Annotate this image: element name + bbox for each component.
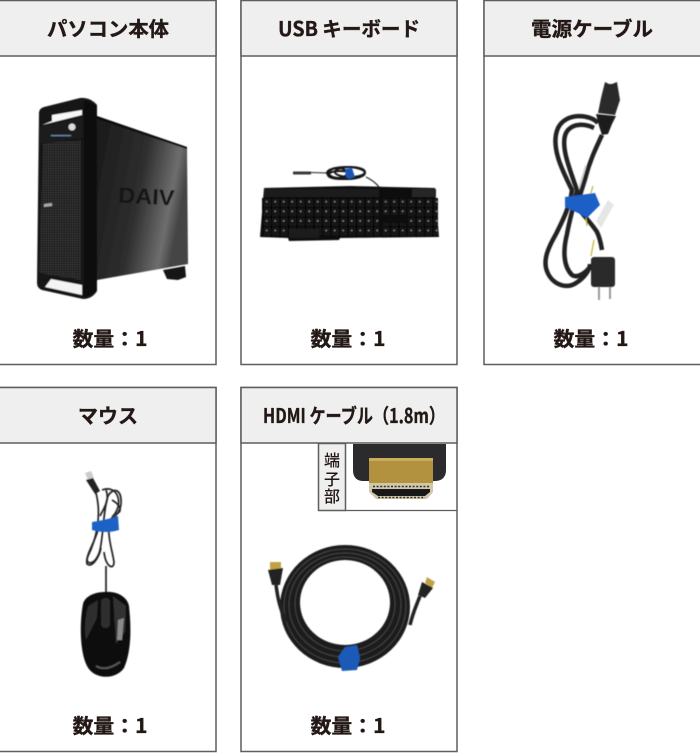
heading: HDMI cable (241, 388, 457, 443)
heading: PC body (0, 0, 216, 56)
heading: HDMI cable: HDMI ケーブル（1.8m） (263, 400, 445, 429)
panel: HDMI cable (241, 388, 457, 752)
heading: USB keyboard (241, 0, 457, 56)
logo: DAIV: DAIV (118, 183, 175, 210)
icon: desktop tower (37, 98, 188, 299)
heading: USB keyboard: USB キーボード (278, 13, 420, 42)
heading: mouse (0, 388, 216, 443)
panel: mouse (0, 388, 216, 752)
label: terminal: 端 (324, 447, 340, 471)
heading: power cable: 電源ケーブル (531, 13, 653, 42)
icon: power cable (545, 82, 620, 300)
label: quantity: 数量：1 (72, 710, 148, 739)
icon: HDMI connector inset (318, 444, 457, 510)
panel: USB keyboard (241, 0, 457, 364)
label: quantity: 数量：1 (72, 323, 148, 352)
panel: PC body (0, 0, 216, 364)
label: quantity: 数量：1 (310, 323, 386, 352)
icon: keyboard (260, 167, 439, 241)
heading: mouse: マウス (78, 400, 138, 429)
heading: power cable (484, 0, 700, 56)
label: terminal: 部 (324, 483, 340, 507)
label: quantity: 数量：1 (310, 710, 386, 739)
label: quantity: 数量：1 (554, 323, 628, 352)
icon: mouse (81, 471, 130, 677)
heading: PC body: パソコン本体 (47, 13, 169, 42)
label: terminal: 子 (324, 466, 340, 490)
panel: power cable (484, 0, 700, 364)
icon: HDMI cable (268, 545, 435, 671)
